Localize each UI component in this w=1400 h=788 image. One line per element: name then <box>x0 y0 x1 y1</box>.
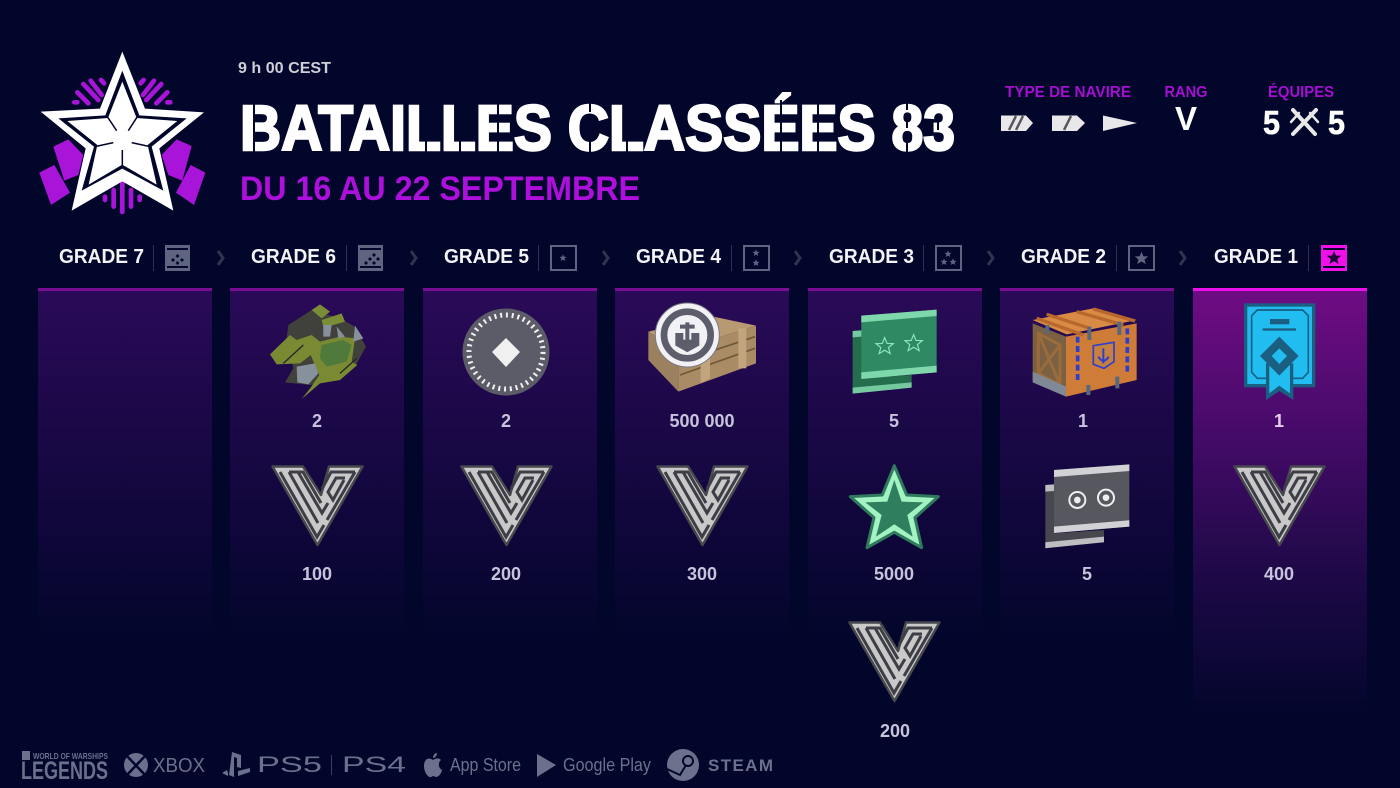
reward amount: 1 <box>1274 411 1284 431</box>
icon: green signal flags <box>853 310 937 394</box>
icon: grade 2 insignia <box>1129 246 1154 270</box>
header info: ship type: TYPE DE NAVIRE <box>1005 84 1131 101</box>
header info: tier <box>1164 84 1208 137</box>
panel: grade 7 <box>38 288 212 650</box>
grade header: grade 1: GRADE 1 <box>1214 246 1298 268</box>
header info: ship type <box>1001 84 1137 131</box>
icon: rank points <box>850 622 940 701</box>
grade header: grade 6: GRADE 6 <box>251 246 336 268</box>
logo: World of Warships Legends <box>21 751 108 785</box>
reward amount: 100 <box>302 564 332 584</box>
header info: teams: 5 <box>1328 104 1345 141</box>
logo: World of Warships Legends: WORLD OF WARSHIPS <box>33 751 108 761</box>
icon: green star points <box>850 466 938 548</box>
icon: rank points <box>272 466 362 545</box>
panel: grade 3 <box>808 288 982 741</box>
icon: rank points <box>658 466 748 545</box>
header info: teams <box>1263 82 1345 141</box>
reward amount: 200 <box>880 721 910 741</box>
grade header: grade 6 <box>251 245 416 271</box>
logo: Google Play: Google Play <box>563 755 651 775</box>
logo: Steam: STEAM <box>708 756 773 775</box>
header info: tier: RANG <box>1164 84 1208 101</box>
icon: diamond token <box>462 308 550 396</box>
header info: teams: ÉQUIPES <box>1268 82 1334 101</box>
panel: grade 4 <box>615 288 789 650</box>
main title: BATAILLES CLASSÉES 83 <box>240 92 955 164</box>
icon: orange supply crate <box>1033 308 1137 397</box>
logo: PS5 <box>222 752 322 777</box>
icon: grade 7 insignia <box>165 245 190 271</box>
grade header: grade 2: GRADE 2 <box>1021 246 1106 268</box>
logo: Xbox <box>124 753 205 777</box>
panel: grade 5 <box>423 288 597 650</box>
grade header: grade 4: GRADE 4 <box>636 246 722 268</box>
icon: rank points <box>1234 466 1324 545</box>
icon: camouflage <box>270 304 366 399</box>
grade header: grade 3: GRADE 3 <box>829 246 914 268</box>
icon: rank points <box>462 466 552 545</box>
reward amount: 5 <box>1082 564 1092 584</box>
grade header: grade 3 <box>829 245 993 271</box>
header info: teams: 5 <box>1263 104 1280 141</box>
icon: grey signal flags <box>1045 464 1129 548</box>
panel: grade 2 <box>1000 288 1174 650</box>
logo: App Store: App Store <box>450 755 521 775</box>
reward amount: 1 <box>1078 411 1088 431</box>
logo: Xbox: XBOX <box>153 755 205 777</box>
grade header: grade 5 <box>444 245 608 271</box>
date subtitle: DU 16 AU 22 SEPTEMBRE <box>240 170 640 208</box>
icon: grade 6 insignia <box>358 245 383 271</box>
grade header: grade 7 <box>59 245 223 271</box>
icon: ship type 3 <box>1103 116 1137 131</box>
icon: ship type 1 <box>1001 116 1033 131</box>
reward amount: 5000 <box>874 564 914 584</box>
reward amount: 300 <box>687 564 717 584</box>
icon: credits crate <box>648 303 756 392</box>
logo: App Store <box>424 753 521 777</box>
icon: grade 3 insignia <box>936 246 961 270</box>
reward amount: 2 <box>312 411 322 431</box>
logo: PS4: PS4 <box>342 752 406 777</box>
icon: grade 4 insignia <box>744 246 769 270</box>
footer: platform logos <box>21 749 773 785</box>
logo: PS5: PS5 <box>257 752 322 777</box>
grade header: grade 1 <box>1214 245 1347 271</box>
grade header: grade 7: GRADE 7 <box>59 246 144 268</box>
header time: 9 h 00 CEST <box>238 60 332 77</box>
grade header: grade 4 <box>636 245 800 271</box>
panel: grade 1 highlighted <box>1193 288 1367 723</box>
reward amount: 500 000 <box>670 411 734 431</box>
logo: World of Warships Legends: LEGENDS <box>21 757 108 785</box>
grade header: grade 5: GRADE 5 <box>444 246 529 268</box>
icon: grade 1 insignia <box>1321 245 1347 271</box>
icon: blue certificate <box>1244 303 1315 400</box>
panel: grade 6 <box>230 288 404 650</box>
grade header: grade 2 <box>1021 245 1185 271</box>
header info: tier: V <box>1175 100 1197 137</box>
icon: ship type 2 <box>1052 116 1085 131</box>
logo: Steam <box>667 749 773 781</box>
logo: Google Play <box>537 754 651 777</box>
reward amount: 200 <box>491 564 521 584</box>
icon: crossed swords <box>1291 110 1318 134</box>
reward amount: 5 <box>889 411 899 431</box>
icon: grade 5 insignia <box>551 246 576 270</box>
logo: ranked battles star emblem <box>39 52 205 212</box>
reward amount: 400 <box>1264 564 1294 584</box>
reward amount: 2 <box>501 411 511 431</box>
